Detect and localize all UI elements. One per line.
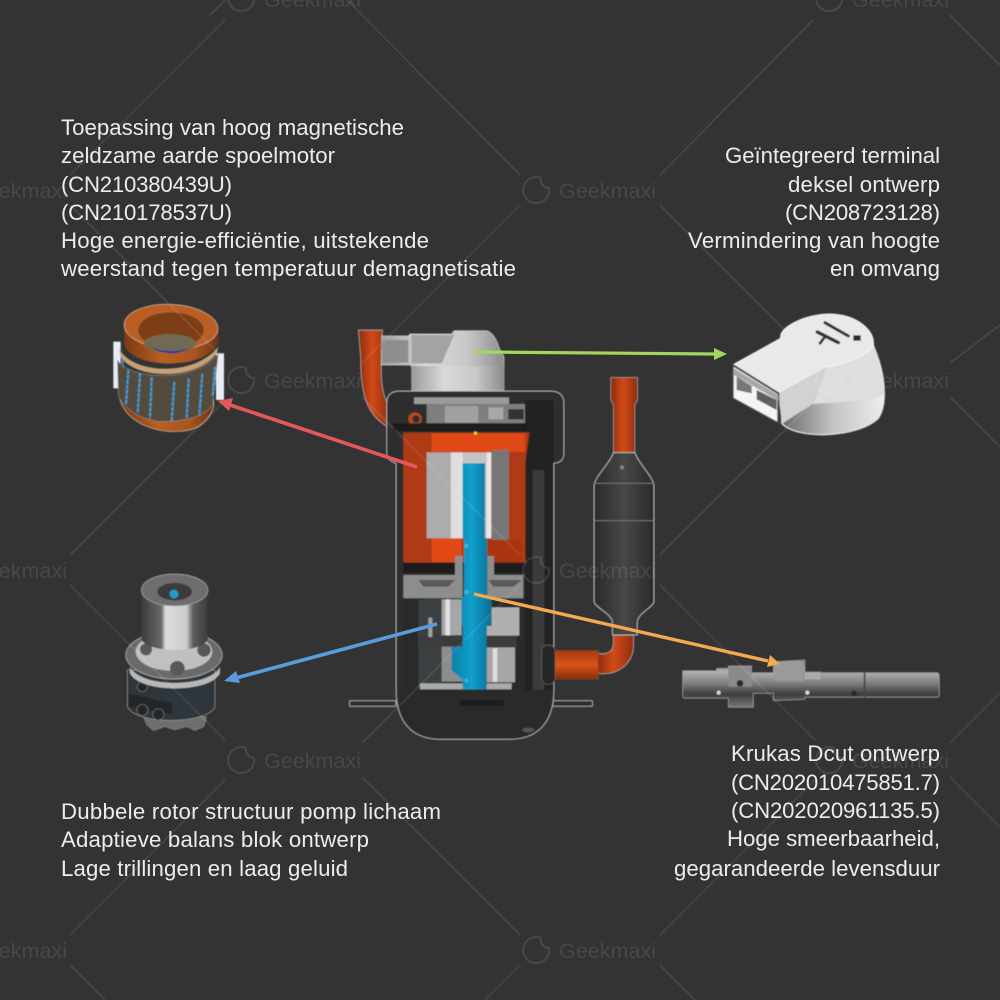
- watermark names: Geekmaxi: [852, 749, 949, 773]
- tan ring: [119, 347, 218, 374]
- steel cylinder: [142, 590, 208, 650]
- pump bottom feet: [143, 717, 207, 731]
- arrow: orange to crankshaft: [474, 594, 780, 667]
- terminal slots: [817, 323, 848, 343]
- blue coil dashes: [122, 355, 215, 422]
- text: coil motor description: Hoge energie-efficiëntie, uitstekende: [61, 228, 429, 253]
- part: compressor cutaway: [349, 330, 654, 739]
- arrow: blue to pump body: [224, 624, 437, 683]
- text: terminal cover description: Vermindering van hoogte: [688, 228, 940, 253]
- top hardware: [414, 397, 509, 404]
- terminal cover: [382, 331, 504, 391]
- pump housing: [403, 563, 525, 573]
- text: pump body description: Dubbele rotor structuur pomp lichaam: [61, 799, 441, 824]
- part: double rotor pump body: [126, 574, 222, 731]
- text: pump body description: [61, 799, 441, 881]
- text: coil motor description: weerstand tegen temperatuur demagnetisatie: [60, 256, 516, 281]
- upper copper ring: [124, 327, 218, 364]
- watermark names: Geekmaxi: [559, 939, 656, 963]
- discharge pipe: [358, 330, 389, 427]
- text: coil motor description: (CN210178537U): [61, 200, 232, 225]
- watermark names: Geekmaxi: [264, 749, 361, 773]
- text: terminal cover description: Geïntegreerd terminal: [725, 143, 940, 168]
- text: coil motor description: (CN210380439U): [61, 172, 232, 197]
- part: crankshaft: [683, 660, 939, 707]
- watermark names: Geekmaxi: [559, 179, 656, 203]
- text: coil motor description: zeldzame aarde spoelmotor: [61, 143, 336, 168]
- accumulator: [611, 377, 638, 453]
- text: crankshaft description: gegarandeerde levensduur: [674, 856, 941, 881]
- winding band: [117, 353, 218, 422]
- cover top: [733, 314, 873, 393]
- flange: [126, 631, 222, 679]
- text: crankshaft description: (CN202010475851.7): [731, 770, 940, 795]
- suction fitting: [597, 635, 634, 674]
- cover side panel: [778, 367, 827, 424]
- lower dark body: [127, 670, 215, 720]
- arrow: red to coil motor: [218, 398, 417, 467]
- text: coil motor description: Toepassing van hoog magnetische: [61, 115, 404, 140]
- mounting feet: [349, 701, 593, 706]
- watermark names: Geekmaxi: [264, 369, 361, 393]
- watermark names: Geekmaxi: [852, 369, 949, 393]
- text: pump body description: Lage trillingen en laag geluid: [61, 856, 348, 881]
- lower copper: [120, 383, 214, 432]
- connector socket: [733, 365, 778, 423]
- text: crankshaft description: Hoge smeerbaarheid,: [727, 826, 940, 851]
- text: coil motor description: [60, 115, 516, 281]
- side channel: [525, 400, 553, 690]
- text: crankshaft description: (CN202020961135.5): [731, 798, 940, 823]
- text: terminal cover description: (CN208723128): [785, 200, 940, 225]
- white end tabs: [113, 342, 224, 400]
- text: crankshaft description: Krukas Dcut ontwerp: [731, 741, 940, 766]
- arrow: green to terminal cover: [476, 348, 727, 360]
- part: rare-earth coil motor: [113, 302, 224, 432]
- part: terminal cover: [733, 314, 884, 435]
- text: terminal cover description: [688, 143, 940, 281]
- crankshaft: [452, 463, 492, 689]
- text: terminal cover description: en omvang: [830, 256, 940, 281]
- text: crankshaft description: [674, 741, 941, 881]
- text: pump body description: Adaptieve balans blok ontwerp: [61, 827, 369, 852]
- stator: [403, 433, 529, 563]
- bottom dome: [397, 690, 553, 738]
- compressor shell: [387, 391, 564, 739]
- text: terminal cover description: deksel ontwerp: [788, 172, 940, 197]
- rotor: [427, 452, 451, 538]
- watermark names: Geekmaxi: [559, 559, 656, 583]
- cover base: [782, 345, 884, 435]
